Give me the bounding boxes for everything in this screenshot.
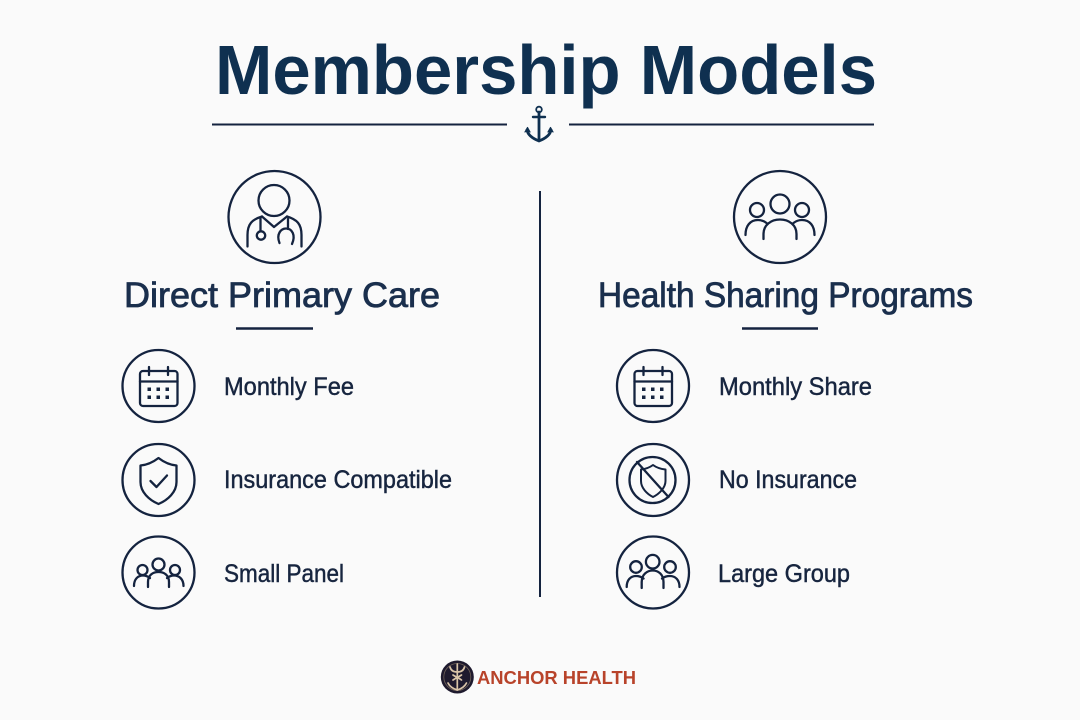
item: monthly share [617,350,872,422]
item: small panel [122,536,344,608]
icon: anchor [525,107,553,141]
label: monthly fee: Monthly Fee [224,373,354,401]
label: small panel: Small Panel [224,560,344,588]
panel: direct primary care [122,171,452,608]
label: no insurance: No Insurance [719,466,857,494]
heading: health sharing programs: Health Sharing Programs [598,276,973,315]
title divider with anchor [212,107,874,141]
icon: shield with check [122,444,194,516]
item: no insurance [617,444,857,516]
item: monthly fee [122,350,354,422]
icon: crossed-out shield [617,444,689,516]
icon: calendar [122,350,194,422]
label: insurance compatible: Insurance Compatible [224,466,452,494]
icon: large group of people [617,536,689,608]
label: large group: Large Group [718,560,850,588]
footer logo: anchor health [441,660,636,694]
heading underline [236,327,313,330]
heading: direct primary care: Direct Primary Care [124,276,440,315]
icon: small group of people [122,536,194,608]
label: monthly share: Monthly Share [719,373,872,401]
item: insurance compatible [122,444,452,516]
panel: health sharing programs [598,171,973,608]
item: large group [617,536,850,608]
icon: doctor with stethoscope [228,171,320,263]
heading underline [742,327,818,330]
brand name: ANCHOR HEALTH [477,667,636,688]
title: Membership Models [215,31,877,109]
central vertical divider [539,191,541,597]
icon: group of people [734,171,826,263]
icon: anchor caduceus badge [441,660,474,694]
icon: calendar [617,350,689,422]
